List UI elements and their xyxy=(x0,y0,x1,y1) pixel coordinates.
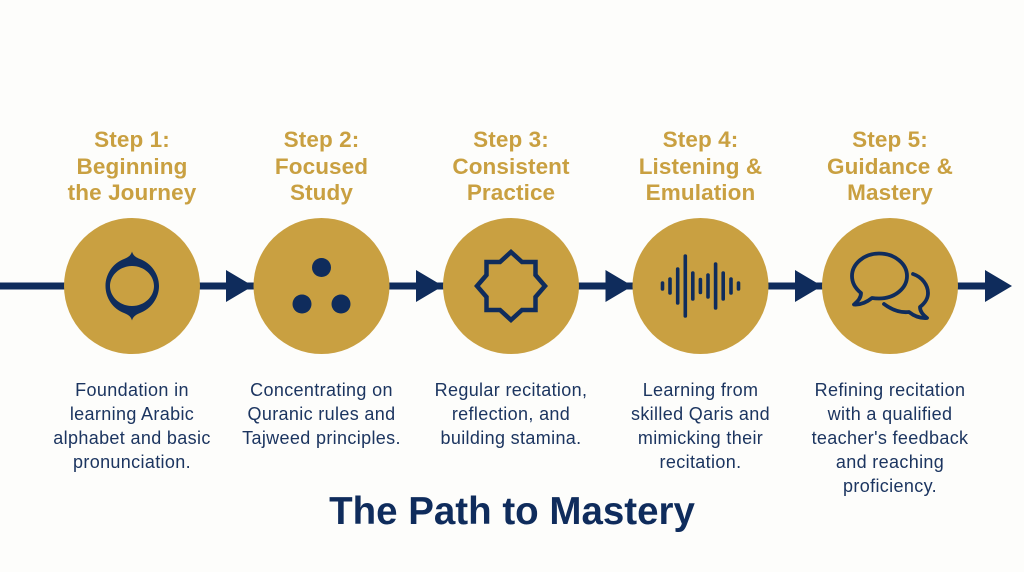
step 5 heading: Mastery xyxy=(847,180,933,205)
arrow 1 xyxy=(226,270,253,302)
step 1 heading: Step 1: xyxy=(94,127,170,152)
step 2 description: Quranic rules and xyxy=(247,404,396,424)
step 3 heading: Step 3: xyxy=(473,127,549,152)
step 3 circle xyxy=(443,218,579,354)
step 4 description: skilled Qaris and xyxy=(631,404,770,424)
step 3 heading: Practice xyxy=(467,180,555,205)
icon: speech bubbles xyxy=(852,254,928,318)
arrow 5 xyxy=(985,270,1012,302)
arrow 4 xyxy=(795,270,822,302)
step 4 heading: Step 4: xyxy=(663,127,738,152)
step 1 heading: Beginning xyxy=(77,154,187,179)
arrow 3 xyxy=(606,270,632,302)
step 2 xyxy=(242,127,401,448)
step 3 heading: Consistent xyxy=(452,154,570,179)
step 2 circle xyxy=(254,218,390,354)
step 1 description: alphabet and basic xyxy=(53,428,211,448)
step 3 xyxy=(435,127,587,448)
step 2 heading: Focused xyxy=(275,154,368,179)
step 1 circle xyxy=(64,218,200,354)
step 4 heading: Emulation xyxy=(646,180,755,205)
icon: sound wave xyxy=(662,256,738,316)
step 2 description: Tajweed principles. xyxy=(242,428,401,448)
step 4 xyxy=(631,127,770,472)
step 5 description: proficiency. xyxy=(843,476,937,496)
step 4 circle xyxy=(632,218,768,354)
step 4 description: recitation. xyxy=(660,452,741,472)
step 5 description: with a qualified xyxy=(827,404,952,424)
step 4 heading: Listening & xyxy=(639,154,762,179)
step 2 heading: Study xyxy=(290,180,353,205)
step 1 description: pronunciation. xyxy=(73,452,191,472)
step 5 description: Refining recitation xyxy=(815,380,965,400)
timeline line xyxy=(0,282,990,290)
arrow 2 xyxy=(416,270,443,302)
step 2 heading: Step 2: xyxy=(284,127,359,152)
step 4 description: Learning from xyxy=(643,380,758,400)
step 4 description: mimicking their xyxy=(638,428,763,448)
icon: ring xyxy=(106,252,159,320)
step 3 description: building stamina. xyxy=(440,428,582,448)
step 3 description: reflection, and xyxy=(452,404,570,424)
step 1 description: learning Arabic xyxy=(70,404,194,424)
step 5 circle xyxy=(822,218,958,354)
step 5 xyxy=(812,127,969,496)
step 5 heading: Guidance & xyxy=(827,154,953,179)
icon: three dots xyxy=(292,258,350,314)
step 5 description: and reaching xyxy=(836,452,944,472)
step 3 description: Regular recitation, xyxy=(435,380,587,400)
title: The Path to Mastery xyxy=(329,490,695,533)
step 1 heading: the Journey xyxy=(68,180,197,205)
icon: eight-point star xyxy=(477,252,545,320)
step 1 description: Foundation in xyxy=(75,380,189,400)
step 1 xyxy=(53,127,211,472)
step 5 heading: Step 5: xyxy=(852,127,928,152)
step 5 description: teacher's feedback xyxy=(812,428,969,448)
step 2 description: Concentrating on xyxy=(250,380,393,400)
